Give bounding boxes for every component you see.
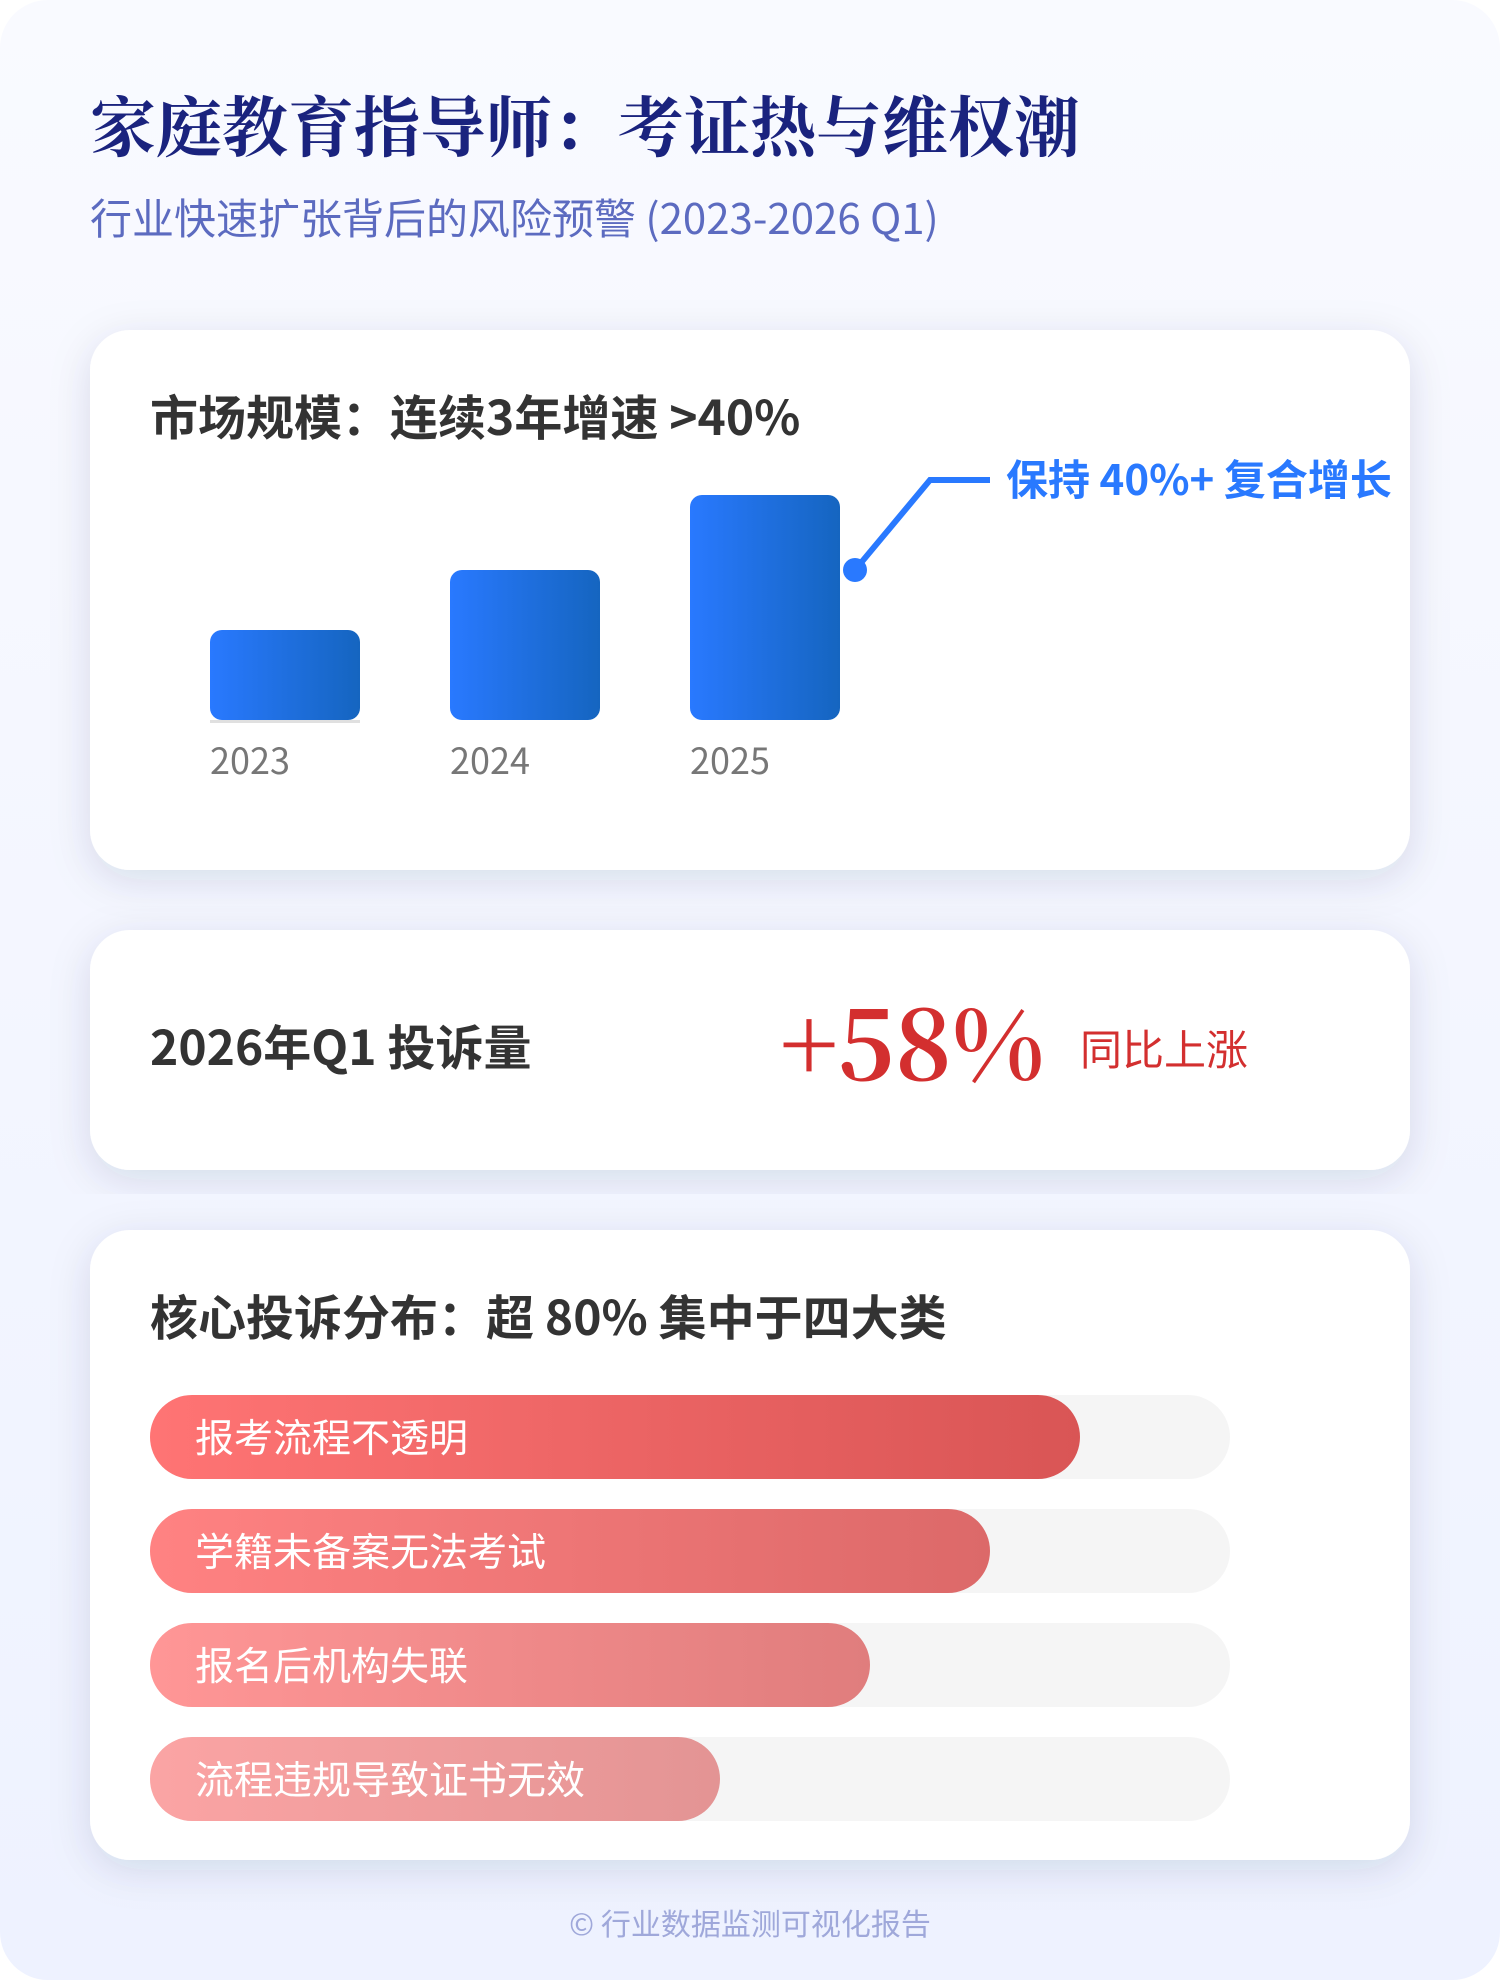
row label: 报考流程不透明 — [195, 1408, 468, 1464]
title: 家庭教育指导师：考证热与维权潮 — [90, 75, 1080, 170]
row label: 流程违规导致证书无效 — [195, 1750, 585, 1806]
heading: distribution: 核心投诉分布：超 80% 集中于四大类 — [150, 1279, 947, 1349]
panel: market size — [150, 379, 1392, 785]
callout text: 保持 40%+ 复合增长 — [1006, 447, 1392, 508]
number note: 同比上涨 — [1080, 1017, 1248, 1078]
row: institution lost contact — [150, 1623, 1230, 1707]
row label: 报名后机构失联 — [195, 1636, 468, 1692]
fill bar — [150, 1395, 1080, 1479]
callout arrow — [843, 477, 990, 582]
label: 2025: 2025 — [690, 733, 770, 785]
big number: +58% — [780, 971, 1045, 1108]
footer: © 行业数据监测可视化报告 — [569, 1900, 931, 1944]
subtitle: 行业快速扩张背后的风险预警 (2023-2026 Q1) — [90, 186, 939, 247]
bar chart — [210, 495, 840, 785]
row: opaque process — [150, 1395, 1230, 1479]
row label: 学籍未备案无法考试 — [195, 1522, 546, 1578]
bar: 2023 — [210, 630, 360, 720]
panel: complaint distribution — [150, 1279, 1230, 1821]
row: invalid certificate — [150, 1737, 1230, 1821]
row: unregistered status — [150, 1509, 1230, 1593]
bar: 2024 — [450, 570, 600, 720]
heading: complaints: 2026年Q1 投诉量 — [150, 1009, 531, 1079]
heading: market size: 市场规模：连续3年增速 >40% — [150, 379, 800, 449]
fill bar — [150, 1737, 720, 1821]
baseline mark — [210, 720, 360, 723]
fill bar — [150, 1623, 870, 1707]
fill bar — [150, 1509, 990, 1593]
label: 2023: 2023 — [210, 733, 290, 785]
bar: 2025 — [690, 495, 840, 720]
panel: complaints Q1 — [150, 971, 1248, 1108]
label: 2024: 2024 — [450, 733, 530, 785]
